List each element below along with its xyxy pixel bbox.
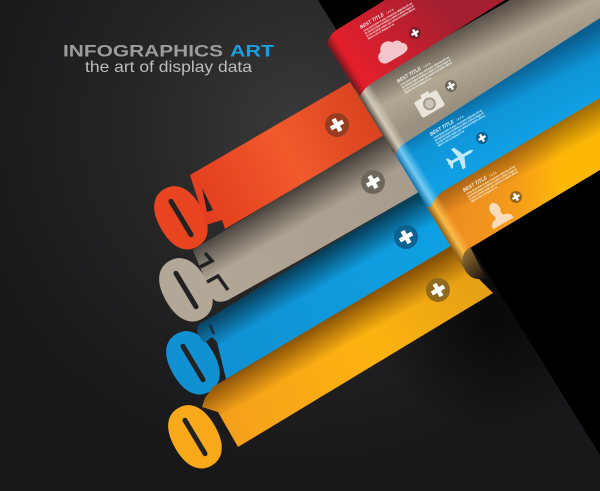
title: ART bbox=[230, 42, 275, 60]
text block orange: Ut enim ad minim veniam, quis nostrud exercitation ullamco bbox=[468, 170, 519, 201]
plus button blue bbox=[390, 221, 422, 253]
text block blue: Ut enim ad minim veniam, quis nostrud exercitation ullamco bbox=[435, 114, 486, 145]
plus button beige bbox=[357, 166, 389, 198]
number 04: 4 bbox=[226, 173, 255, 208]
text block beige: do eiusmod tempor incididunt ut labore et dolore magna ali bbox=[401, 58, 451, 89]
icon: plane bbox=[443, 140, 479, 174]
text block orange: info bbox=[488, 170, 498, 178]
text block beige: Ut enim ad minim veniam, quis nostrud exercitation ullamco bbox=[402, 61, 453, 92]
small plus blue bbox=[474, 130, 490, 146]
text block beige: info bbox=[422, 61, 432, 69]
small plus red bbox=[407, 25, 423, 41]
text block blue: laboris nisi ut aliquip ex ea bbox=[437, 129, 465, 148]
number 01: 1 bbox=[248, 383, 277, 418]
title: INFOGRAPHICS bbox=[63, 42, 223, 60]
small plus beige bbox=[443, 78, 459, 94]
upper band beige bbox=[355, 0, 600, 155]
icon: person bbox=[482, 197, 514, 229]
band shadow on panel bbox=[370, 190, 600, 430]
text block orange: laboris nisi ut aliquip ex ea bbox=[470, 185, 498, 204]
text block blue: Lorem ipsum dolor sit amet, consectetur adipiscing elit sed bbox=[432, 108, 483, 140]
text block red bbox=[359, 0, 417, 41]
text block red: BEST TITLE bbox=[359, 12, 386, 31]
text block orange: Lorem ipsum dolor sit amet, consectetur adipiscing elit sed bbox=[465, 164, 516, 196]
text block red: info bbox=[385, 7, 395, 15]
upper band red bbox=[328, 0, 505, 96]
text block beige: BEST TITLE bbox=[396, 66, 423, 85]
lower band 03 beige bbox=[143, 135, 419, 344]
title bbox=[63, 42, 275, 60]
text block blue: info bbox=[455, 114, 465, 122]
icon: camera bbox=[412, 87, 445, 118]
number 01 bbox=[152, 383, 277, 491]
text block blue: do eiusmod tempor incididunt ut labore et dolore magna ali bbox=[434, 111, 484, 142]
text block orange: BEST TITLE bbox=[462, 175, 489, 194]
number 04: 0 bbox=[138, 168, 225, 272]
text block beige bbox=[396, 51, 454, 95]
text block beige: laboris nisi ut aliquip ex ea bbox=[404, 76, 432, 95]
text block red: laboris nisi ut aliquip ex ea bbox=[367, 22, 395, 41]
icon: cloud bbox=[373, 33, 410, 66]
curl bbox=[462, 247, 486, 279]
lower band 01 yellow bbox=[152, 246, 493, 491]
lower band 04 red bbox=[138, 82, 384, 272]
small plus orange bbox=[508, 189, 524, 205]
number 02: 0 bbox=[150, 313, 237, 417]
number 01: 0 bbox=[152, 387, 239, 491]
text block orange: do eiusmod tempor incididunt ut labore et dolore magna ali bbox=[467, 167, 517, 198]
upper band blue bbox=[390, 15, 600, 207]
text block blue: BEST TITLE bbox=[429, 119, 456, 138]
number 03: 3 bbox=[231, 245, 260, 280]
number 02: 2 bbox=[241, 313, 270, 348]
plus button red bbox=[321, 109, 353, 141]
text block orange bbox=[462, 160, 520, 204]
upper band yellow bbox=[425, 88, 600, 279]
text block beige: Lorem ipsum dolor sit amet, consectetur adipiscing elit sed bbox=[399, 55, 450, 87]
lower band 02 blue bbox=[150, 192, 451, 417]
subtitle: the art of display data bbox=[85, 59, 252, 76]
number 03: 0 bbox=[143, 240, 230, 344]
plus button yellow bbox=[422, 274, 454, 306]
text block blue bbox=[429, 104, 487, 148]
